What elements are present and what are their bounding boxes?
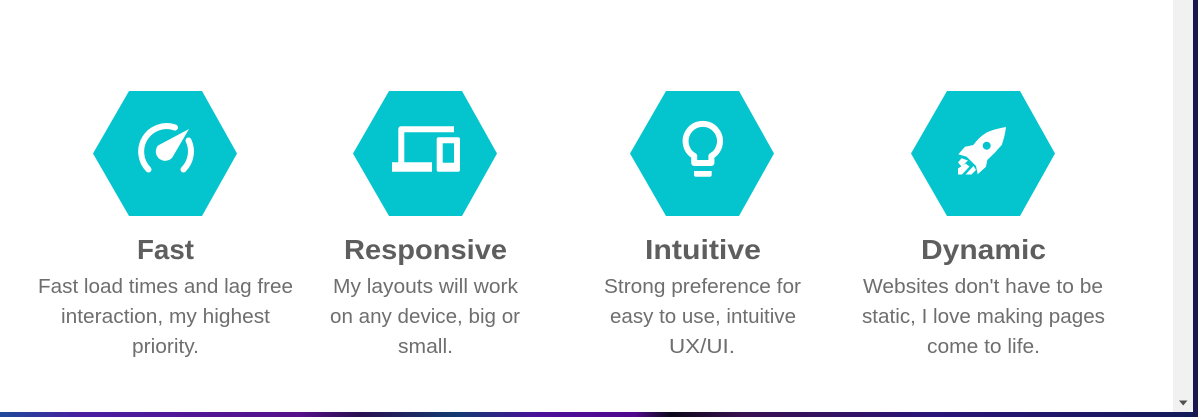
feature: Intuitive	[604, 91, 801, 358]
hexagon: Dynamic	[911, 91, 1055, 216]
hexagon: Responsive	[353, 91, 497, 216]
text: Responsive description: on any device, big or	[330, 306, 520, 328]
scrollbar	[1173, 0, 1193, 412]
text: Intuitive description: Strong preference for	[604, 276, 801, 298]
text: Intuitive description: UX/UI.	[669, 336, 735, 358]
icon: light bulb	[686, 124, 720, 177]
icon: laptop and tablet	[392, 126, 460, 172]
text: Fast description: priority.	[132, 336, 199, 358]
text: Dynamic description: come to life.	[927, 336, 1040, 358]
text: Responsive description	[330, 276, 520, 358]
icon: rocket	[958, 127, 1006, 174]
text: Dynamic description: static, I love making pages	[862, 306, 1105, 328]
feature: Dynamic	[862, 91, 1105, 358]
heading: Dynamic: Dynamic	[921, 234, 1046, 265]
heading: Intuitive: Intuitive	[645, 234, 761, 265]
feature: Responsive	[330, 91, 520, 358]
text: Responsive description: My layouts will work	[333, 276, 519, 298]
text: Intuitive description	[604, 276, 801, 358]
icon: speedometer	[141, 126, 191, 170]
text: Intuitive description: easy to use, intuitive	[610, 306, 796, 328]
text: Fast description: Fast load times and lag free	[38, 276, 293, 298]
text: Fast description: interaction, my highest	[61, 306, 270, 328]
heading: Fast: Fast	[137, 234, 194, 265]
heading: Responsive: Responsive	[344, 234, 507, 265]
feature: Fast	[38, 91, 293, 358]
text: Dynamic description: Websites don't have to be	[863, 276, 1103, 298]
hexagon: Intuitive	[630, 91, 774, 216]
text: Fast description	[38, 276, 293, 358]
text: Responsive description: small.	[398, 336, 453, 358]
hexagon: Fast	[93, 91, 237, 216]
text: Dynamic description	[862, 276, 1105, 358]
